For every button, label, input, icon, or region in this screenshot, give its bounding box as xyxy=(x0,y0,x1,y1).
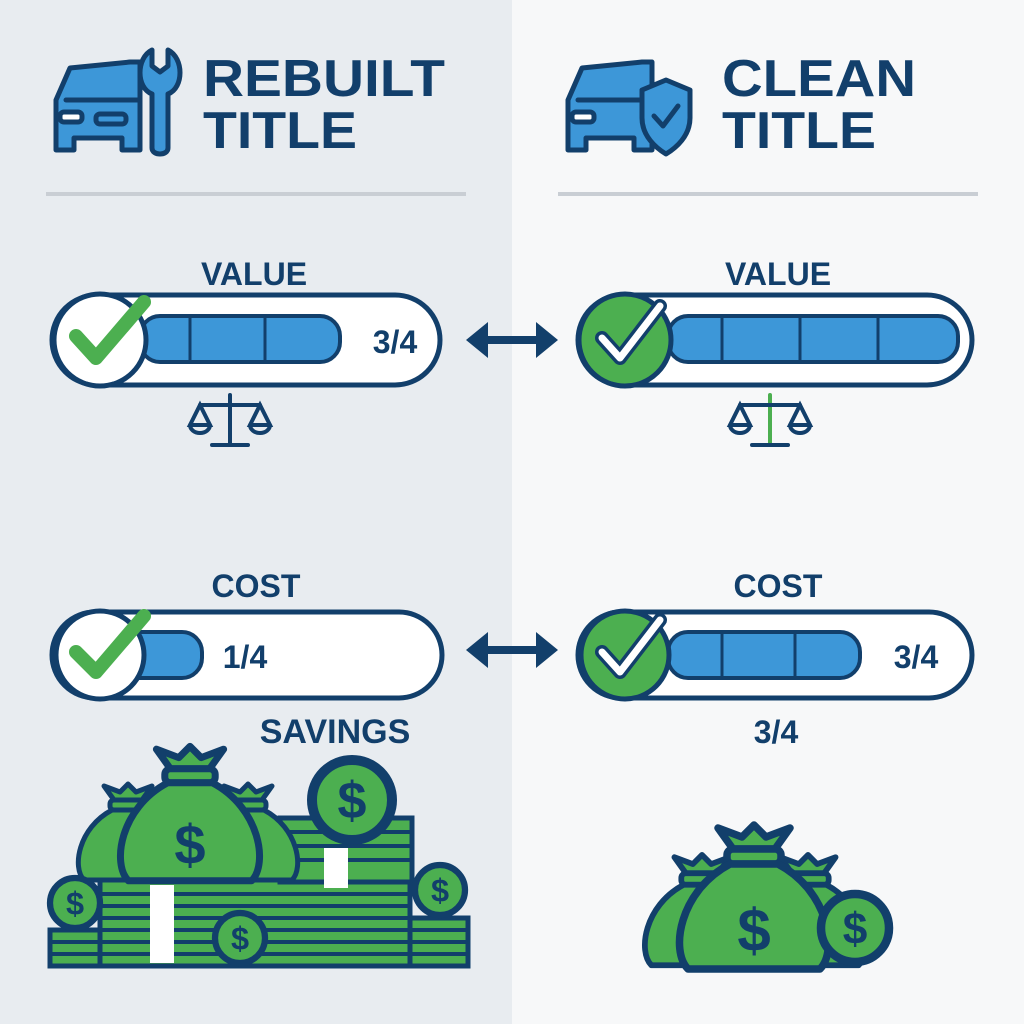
value bar left xyxy=(52,294,440,386)
value bar right xyxy=(578,294,972,386)
background: left panel xyxy=(0,0,512,1024)
illustration: money pile xyxy=(50,746,468,966)
icon: scales right xyxy=(730,395,810,445)
icon: scales left xyxy=(190,395,270,445)
text: TITLE xyxy=(203,102,357,160)
icon: car with wrench xyxy=(56,50,180,154)
heading: cost left: COST xyxy=(212,568,301,604)
heading: value left: VALUE xyxy=(201,256,307,292)
label: right 3/4: 3/4 xyxy=(754,714,798,750)
title: clean: CLEAN xyxy=(722,50,916,108)
cost bar left xyxy=(52,611,442,699)
value bar left: 3/4 xyxy=(373,324,417,360)
icon: car with shield xyxy=(568,62,690,154)
heading: value right: VALUE xyxy=(725,256,831,292)
background: right panel xyxy=(512,0,1024,1024)
cost bar right xyxy=(578,611,972,699)
cost bar left: 1/4 xyxy=(223,639,267,675)
cost bar right: 3/4 xyxy=(894,639,938,675)
illustration: small money bags xyxy=(645,825,889,969)
heading: cost right: COST xyxy=(734,568,823,604)
label: savings: SAVINGS xyxy=(260,713,410,751)
arrow: value compare xyxy=(466,322,558,358)
arrow: cost compare xyxy=(466,632,558,668)
title: rebuilt: REBUILT xyxy=(203,50,445,108)
text: TITLE xyxy=(722,102,876,160)
